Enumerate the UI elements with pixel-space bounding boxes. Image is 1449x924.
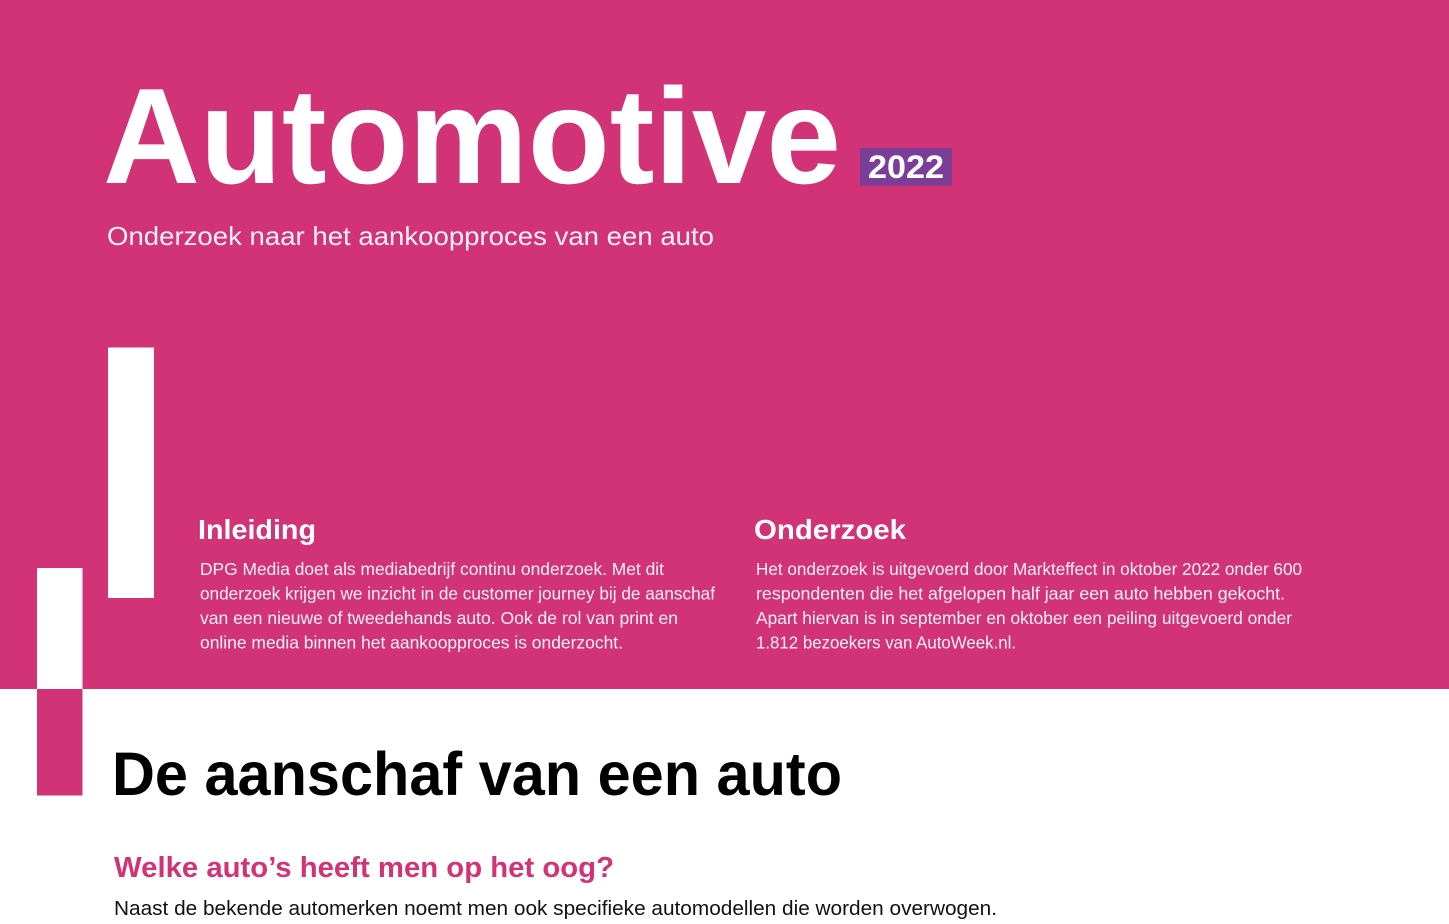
heading: Inleiding: Inleiding	[198, 514, 316, 545]
body: Inleiding	[200, 559, 715, 652]
decorative block: white bar on pink	[37, 568, 82, 689]
subtitle: Onderzoek naar het aankoopproces van een auto	[107, 221, 714, 251]
panel: pink header background	[0, 0, 1449, 689]
title: Automotive	[103, 60, 841, 212]
text block: Inleiding	[198, 514, 715, 652]
section heading: De aanschaf van een auto	[112, 740, 842, 808]
body: Onderzoek: 1.812 bezoekers van AutoWeek.nl.	[756, 632, 1016, 652]
body: Onderzoek: Apart hiervan is in september en oktober een peiling uitgevoerd onder	[756, 608, 1292, 628]
body: Inleiding: DPG Media doet als mediabedrijf continu onderzoek. Met dit	[200, 559, 664, 579]
question heading: Welke auto’s heeft men op het oog?	[114, 852, 614, 884]
body: Inleiding: online media binnen het aankoopproces is onderzocht.	[200, 632, 623, 652]
body: Onderzoek: respondenten die het afgelopen half jaar een auto hebben gekocht.	[756, 584, 1285, 604]
body: Onderzoek: Het onderzoek is uitgevoerd door Markteffect in oktober 2022 onder 600	[756, 559, 1302, 579]
body: Inleiding: onderzoek krijgen we inzicht in de customer journey bij de aanschaf	[200, 584, 715, 604]
heading: Onderzoek: Onderzoek	[754, 514, 906, 545]
body: Inleiding: van een nieuwe of tweedehands auto. Ook de rol van print en	[200, 608, 678, 628]
intro text: Naast de bekende automerken noemt men ook specifieke automodellen die worden overwogen.	[114, 898, 997, 920]
decorative block: tall white bar	[108, 348, 154, 598]
year badge: 2022	[868, 149, 944, 185]
body: Onderzoek	[756, 559, 1302, 652]
decorative block: pink bar on white	[37, 689, 82, 796]
text block: Onderzoek	[754, 514, 1302, 652]
